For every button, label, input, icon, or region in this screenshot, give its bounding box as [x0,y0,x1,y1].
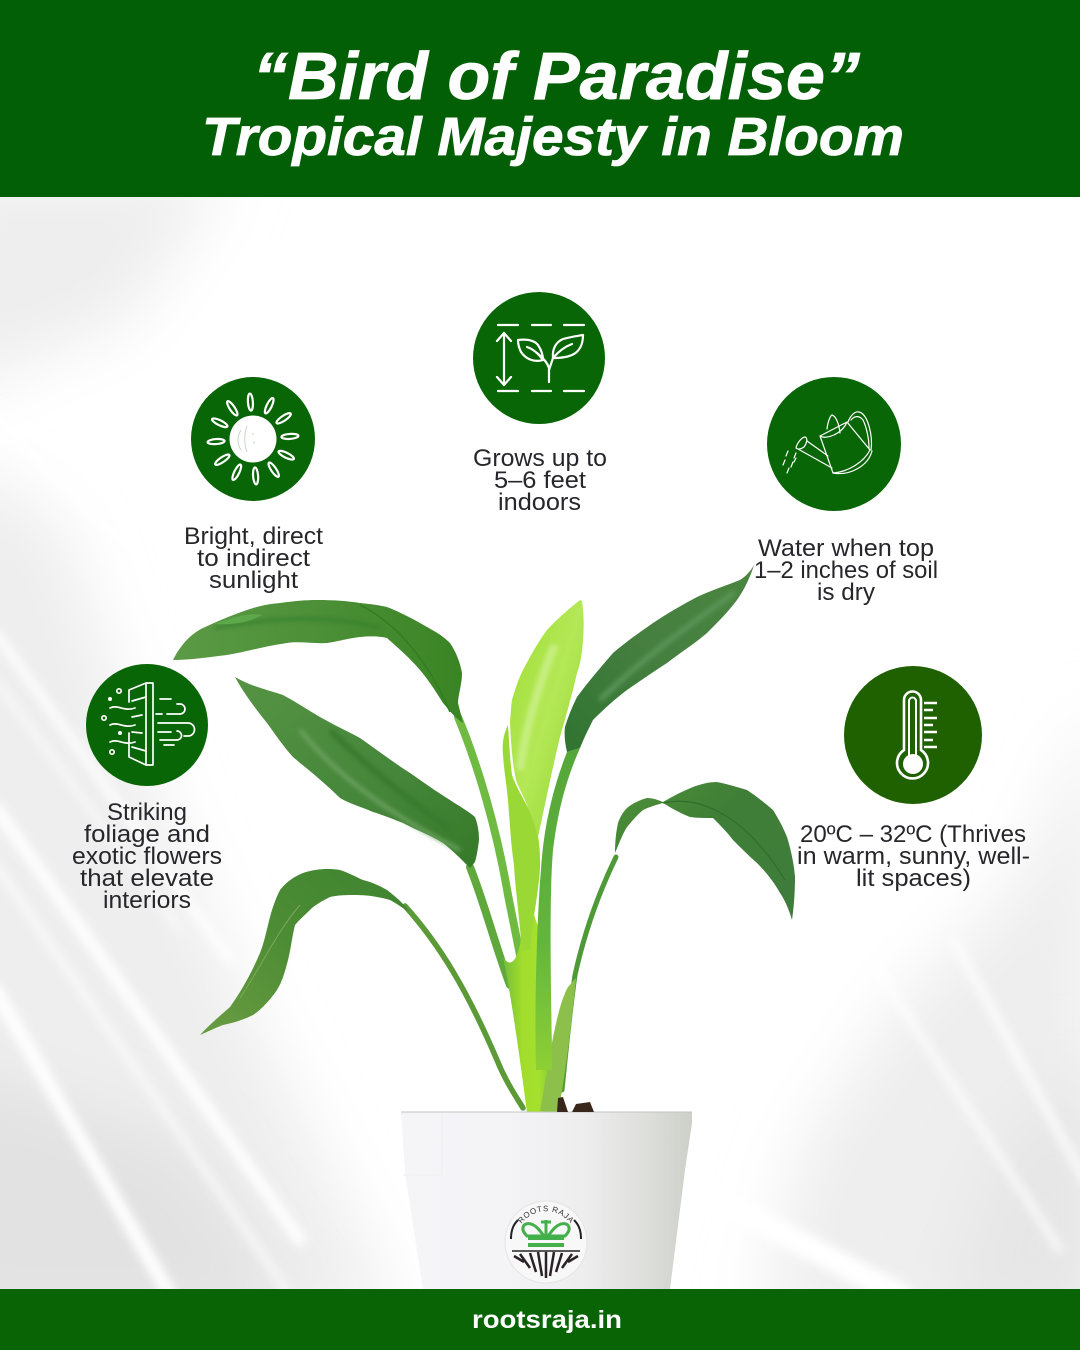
text: height [473,445,607,516]
leaf: top right [565,565,754,752]
text: height: 5–6 feet [494,467,586,494]
text: foliage [72,799,222,914]
text: height: indoors [498,489,581,516]
text: temperature: in warm, sunny, well- [797,843,1030,870]
icon: air filter [86,664,208,786]
text: temperature: 20ºC – 32ºC (Thrives [800,821,1026,848]
text: foliage: foliage and [84,821,210,848]
pot [401,1097,692,1289]
soil [557,1097,594,1112]
website: rootsraja.in [472,1306,622,1334]
plant [173,565,795,1112]
text: foliage: exotic flowers [72,843,222,870]
text: foliage: Striking [107,799,187,826]
text: sunlight: to indirect [197,545,310,572]
text: height: Grows up to [473,445,607,472]
text: watering: Water when top [758,535,934,562]
logo badge [504,1200,588,1284]
leaf: middle left [235,677,479,868]
text: watering: 1–2 inches of soil [754,557,938,584]
footer band [0,1289,1080,1350]
text: temperature [797,821,1030,892]
logo badge: ROOTS RAJA [518,1206,573,1224]
leaf: top left [173,600,463,723]
text: watering: is dry [817,579,875,606]
text: sunlight [184,523,323,594]
central stalks [503,915,558,1112]
icon: thermometer [844,666,982,804]
icon: height / plant [473,292,605,424]
leaf: right [615,782,795,920]
title line 1: “Bird of Paradise” [253,39,861,114]
text: foliage: interiors [103,887,191,914]
stems [405,717,616,1108]
leaf: central young [503,725,540,950]
leaf: lower left [200,869,410,1035]
text: watering [754,535,938,606]
title line 2: Tropical Majesty in Bloom [202,107,904,167]
text: sunlight: sunlight [209,567,298,594]
text: foliage: that elevate [80,865,214,892]
stem of top right leaf [535,748,580,1070]
header band [0,0,1080,197]
icon: watering can [767,377,901,511]
text: temperature: lit spaces) [856,865,971,892]
text: sunlight: Bright, direct [184,523,323,550]
icon: sun [191,377,315,501]
